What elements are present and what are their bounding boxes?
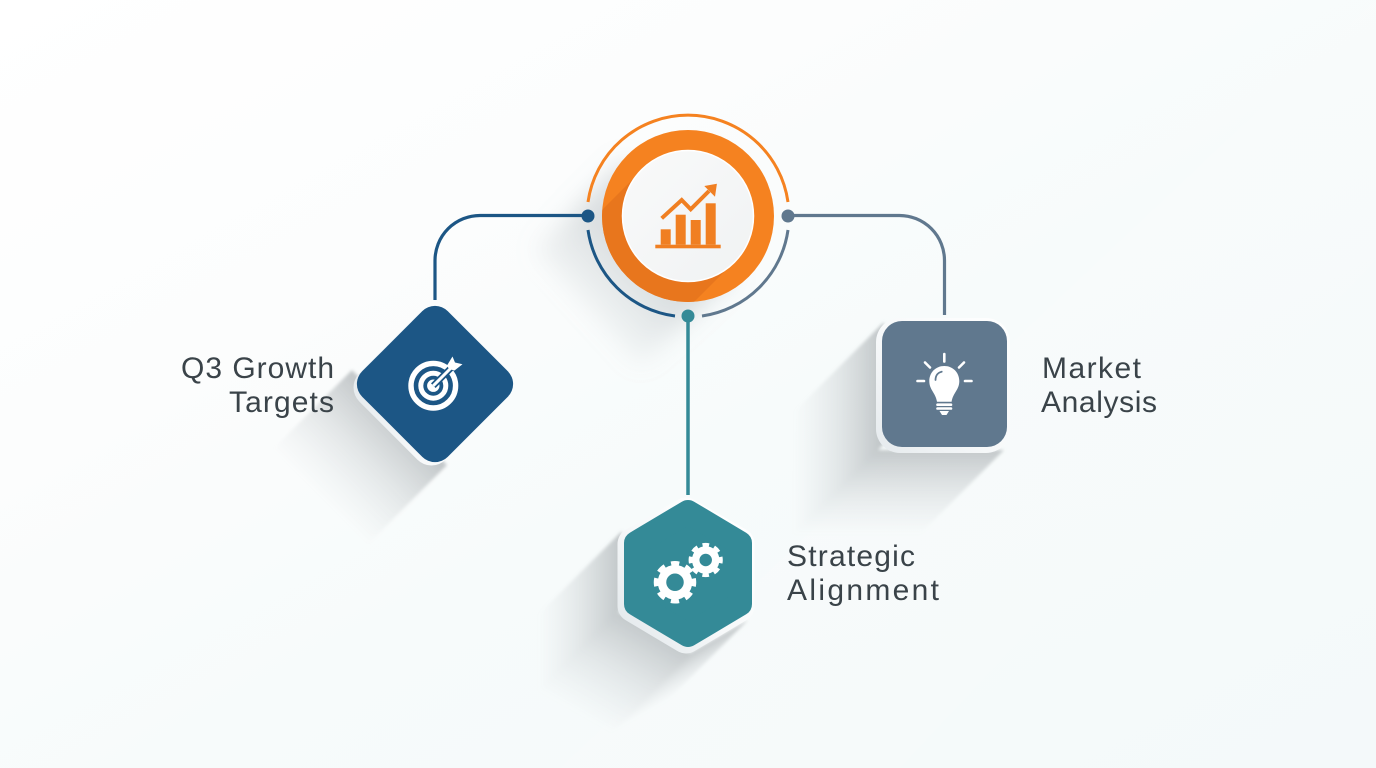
icon: target xyxy=(411,356,462,408)
label: Q3 Growth Targets: Targets xyxy=(229,386,334,419)
square edge xyxy=(876,318,1010,453)
diamond body xyxy=(349,298,521,470)
shadow: hub xyxy=(535,160,735,365)
shadow: square xyxy=(793,322,1004,535)
dot: slate xyxy=(782,210,794,222)
connector: hub to Market Analysis xyxy=(788,216,944,315)
panel: Strategic Alignment hexagon xyxy=(634,512,740,637)
connector: hub to Strategic Alignment xyxy=(686,316,690,495)
white disc xyxy=(622,150,754,282)
connector: hub to Q3 Growth Targets xyxy=(435,216,588,300)
shadow: hexagon xyxy=(538,531,748,733)
label: Market Analysis: Analysis xyxy=(1041,386,1157,419)
icon: light bulb xyxy=(918,354,972,415)
label: Strategic Alignment: Alignment xyxy=(787,574,940,607)
shadow: diamond xyxy=(272,370,447,545)
square body xyxy=(882,321,1007,447)
outer arc: blue xyxy=(588,230,675,316)
ring cast shadow xyxy=(602,180,724,302)
outer arc: slate xyxy=(702,230,788,316)
icon: gears xyxy=(656,545,721,601)
label: Market Analysis: Market xyxy=(1042,352,1142,385)
icon: growth chart xyxy=(655,184,721,248)
label: Strategic Alignment: Strategic xyxy=(787,540,915,573)
label: Q3 Growth Targets: Q3 Growth xyxy=(181,352,334,385)
dot: blue xyxy=(582,210,594,222)
panel: Q3 Growth Targets diamond xyxy=(345,298,521,474)
diamond edge xyxy=(345,301,518,474)
outer arc: orange xyxy=(588,115,788,202)
hexagon edge xyxy=(634,514,738,637)
panel: Market Analysis square xyxy=(876,318,1010,453)
panel: central hub xyxy=(586,114,790,318)
hexagon body xyxy=(636,512,740,635)
orange ring xyxy=(602,130,774,302)
dot: teal xyxy=(682,310,694,322)
